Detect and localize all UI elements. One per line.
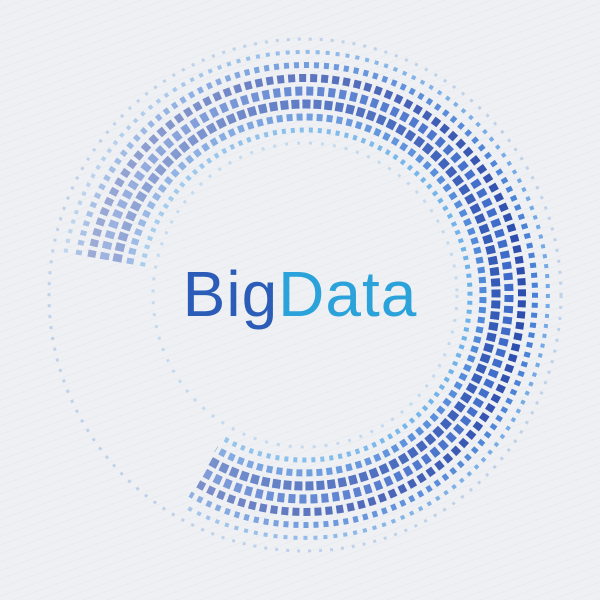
title: BigData: BigData — [183, 258, 417, 330]
decorative scattered outer dots — [49, 39, 561, 551]
pixel ring — [66, 52, 548, 538]
